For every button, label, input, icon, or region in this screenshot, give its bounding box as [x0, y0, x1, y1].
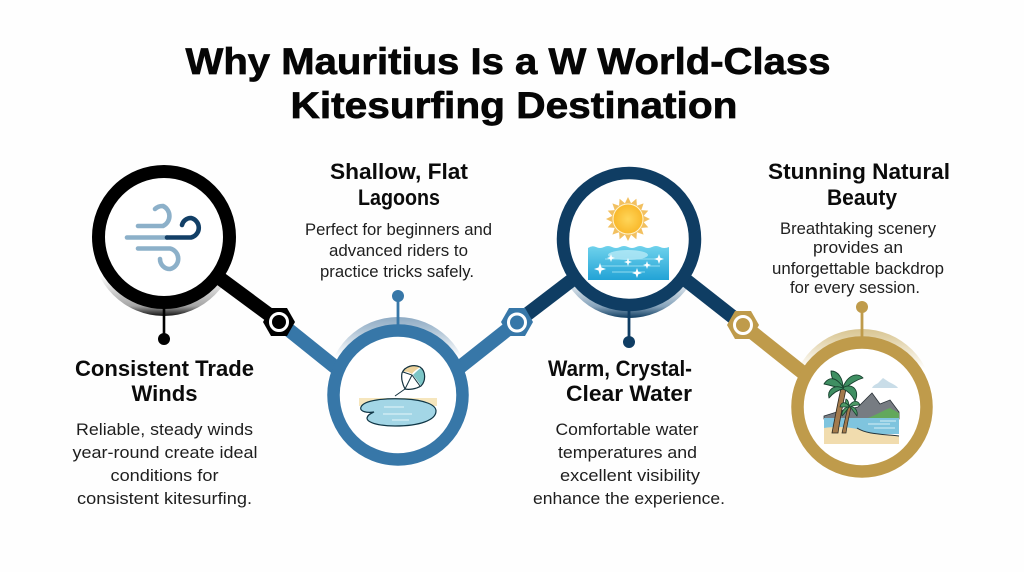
description: for every session. — [790, 278, 920, 297]
icon: kite over lagoon — [359, 366, 437, 426]
description: practice tricks safely. — [320, 262, 474, 281]
title — [186, 41, 830, 126]
description: provides an — [813, 238, 903, 257]
text block: consistent trade winds — [72, 356, 258, 508]
heading: Warm, Crystal- — [548, 356, 692, 381]
stem and dot — [623, 300, 635, 348]
heading: Lagoons — [358, 185, 440, 210]
heading: Clear Water — [566, 381, 692, 406]
description: Breathtaking scenery — [780, 219, 936, 238]
ring — [798, 342, 926, 472]
hex nut 2 — [501, 308, 533, 336]
icon: sparkling water — [588, 246, 669, 280]
text block: shallow, flat lagoons — [305, 159, 492, 281]
ring — [334, 330, 462, 460]
title: Kitesurfing Destination — [290, 85, 738, 126]
stem and dot — [392, 290, 404, 330]
heading: Winds — [132, 381, 198, 406]
heading: Shallow, Flat — [330, 159, 469, 184]
heading — [75, 356, 254, 406]
ring — [563, 173, 695, 305]
description: excellent visibility — [560, 466, 701, 485]
step 4: ring with beach icon — [798, 301, 926, 472]
description — [533, 420, 725, 508]
description — [772, 219, 944, 297]
heading — [768, 159, 950, 210]
step 2: ring with kite and lagoon icon — [334, 290, 462, 460]
heading — [330, 159, 469, 210]
description: consistent kitesurfing. — [77, 489, 252, 508]
connector: blue arm left of lagoon ring — [279, 322, 345, 375]
connector: blue arm right of lagoon ring — [450, 322, 517, 375]
title: Why Mauritius Is a W World-Class — [186, 41, 830, 82]
stem and dot — [158, 300, 170, 345]
icon: wind — [127, 206, 199, 269]
step 1: ring with wind icon — [98, 172, 230, 345]
ring — [98, 172, 230, 302]
icon: beach scene — [824, 371, 899, 444]
ring shadows — [92, 172, 933, 471]
description — [72, 420, 258, 508]
description: Perfect for beginners and — [305, 220, 492, 239]
connector: navy arm left of water ring — [517, 270, 585, 322]
description: temperatures and — [558, 443, 697, 462]
connector: black arm to first hex nut — [164, 237, 279, 322]
icon: sun — [606, 197, 650, 241]
heading — [548, 356, 692, 406]
stem and dot — [856, 301, 868, 340]
heading: Consistent Trade — [75, 356, 254, 381]
description — [305, 220, 492, 281]
description: unforgettable backdrop — [772, 259, 944, 278]
description: Reliable, steady winds — [76, 420, 253, 439]
text block: stunning natural beauty — [768, 159, 950, 297]
heading: Stunning Natural — [768, 159, 950, 184]
description: conditions for — [110, 466, 219, 485]
hex nut 3 — [727, 311, 759, 339]
hex nut 1 — [263, 308, 295, 336]
step 3: ring with sun and water icon — [563, 173, 695, 348]
text block: warm, crystal-clear water — [533, 356, 725, 508]
description: enhance the experience. — [533, 489, 725, 508]
connector: navy arm right of water ring — [673, 270, 743, 325]
description: Comfortable water — [556, 420, 699, 439]
description: advanced riders to — [329, 241, 468, 260]
description: year-round create ideal — [72, 443, 258, 462]
connector: gold arm to beauty ring — [743, 325, 812, 380]
heading: Beauty — [827, 185, 898, 210]
